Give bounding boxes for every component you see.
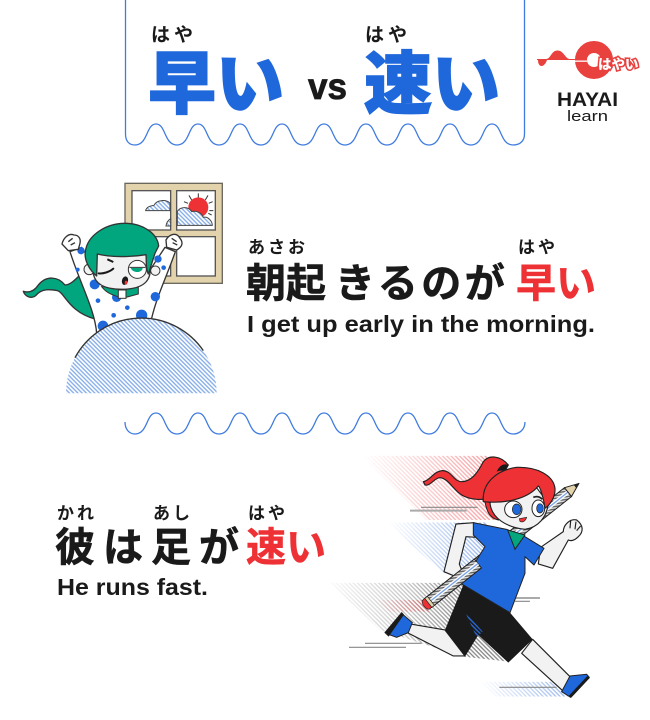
sentence: 彼は足が速い xyxy=(55,504,326,600)
illustration: girl running with a pencil xyxy=(330,456,590,698)
phrase: 速い in red: 速い xyxy=(246,526,326,570)
phrase: 朝起きるのが: きるのが xyxy=(335,262,508,306)
icon: sun xyxy=(184,193,213,217)
illustration: girl waking up by the window xyxy=(23,183,222,393)
shorts xyxy=(445,585,533,663)
mouth xyxy=(519,517,527,522)
hair ponytail xyxy=(23,275,97,319)
collar xyxy=(508,530,525,549)
pencil xyxy=(425,479,583,607)
window xyxy=(125,183,222,283)
text: learn: learn xyxy=(567,108,608,125)
phrase: 朝起きるのが xyxy=(246,262,508,306)
sentence: 朝起きるのが早い xyxy=(246,238,596,337)
icon: clouds xyxy=(146,201,212,226)
furigana: はや (fast): はや xyxy=(365,24,411,46)
heading: 速い: 速い xyxy=(364,47,500,123)
shoes xyxy=(384,612,590,698)
furigana: はや: はや xyxy=(248,504,288,523)
icon: wave and ring mark: はやい xyxy=(598,56,638,72)
hair xyxy=(483,467,555,508)
translation: He runs fast: He runs fast. xyxy=(57,574,208,600)
logo: HAYAI learn xyxy=(537,47,638,125)
blanket xyxy=(66,318,217,393)
title frame with wavy bottom xyxy=(126,0,524,145)
arms xyxy=(444,520,582,577)
heading: 早い: 早い xyxy=(148,47,284,123)
open eye xyxy=(128,260,146,278)
eyes xyxy=(505,501,522,518)
hair xyxy=(85,223,159,276)
title: 早い vs 速い xyxy=(148,24,500,123)
furigana: あさお: あさお xyxy=(248,238,308,257)
furigana: かれ: かれ xyxy=(57,504,97,523)
head xyxy=(84,223,160,298)
furigana: はや: はや xyxy=(518,238,558,257)
pencil front section xyxy=(421,559,481,611)
pajamas xyxy=(70,247,175,333)
legs xyxy=(407,624,572,691)
hands xyxy=(62,234,182,251)
text: vs: vs xyxy=(308,66,347,107)
phrase: 彼は足が: 彼は足が xyxy=(55,526,247,570)
text: HAYAI: HAYAI xyxy=(557,89,618,111)
hair tie xyxy=(497,464,508,472)
furigana: はや (early): はや xyxy=(151,24,197,46)
translation: I get up early: I get up early in the morning. xyxy=(247,311,595,337)
mouth xyxy=(121,276,129,286)
ponytail xyxy=(423,457,508,499)
wavy divider xyxy=(125,413,525,434)
phrase: 早い in red: 早い xyxy=(516,262,596,306)
phrase: 朝起きるのが: 朝起 xyxy=(246,262,326,306)
speed lines xyxy=(330,456,570,697)
head xyxy=(483,467,555,529)
shirt xyxy=(462,523,544,613)
closed eye xyxy=(99,269,113,273)
furigana: あし: あし xyxy=(153,504,193,523)
